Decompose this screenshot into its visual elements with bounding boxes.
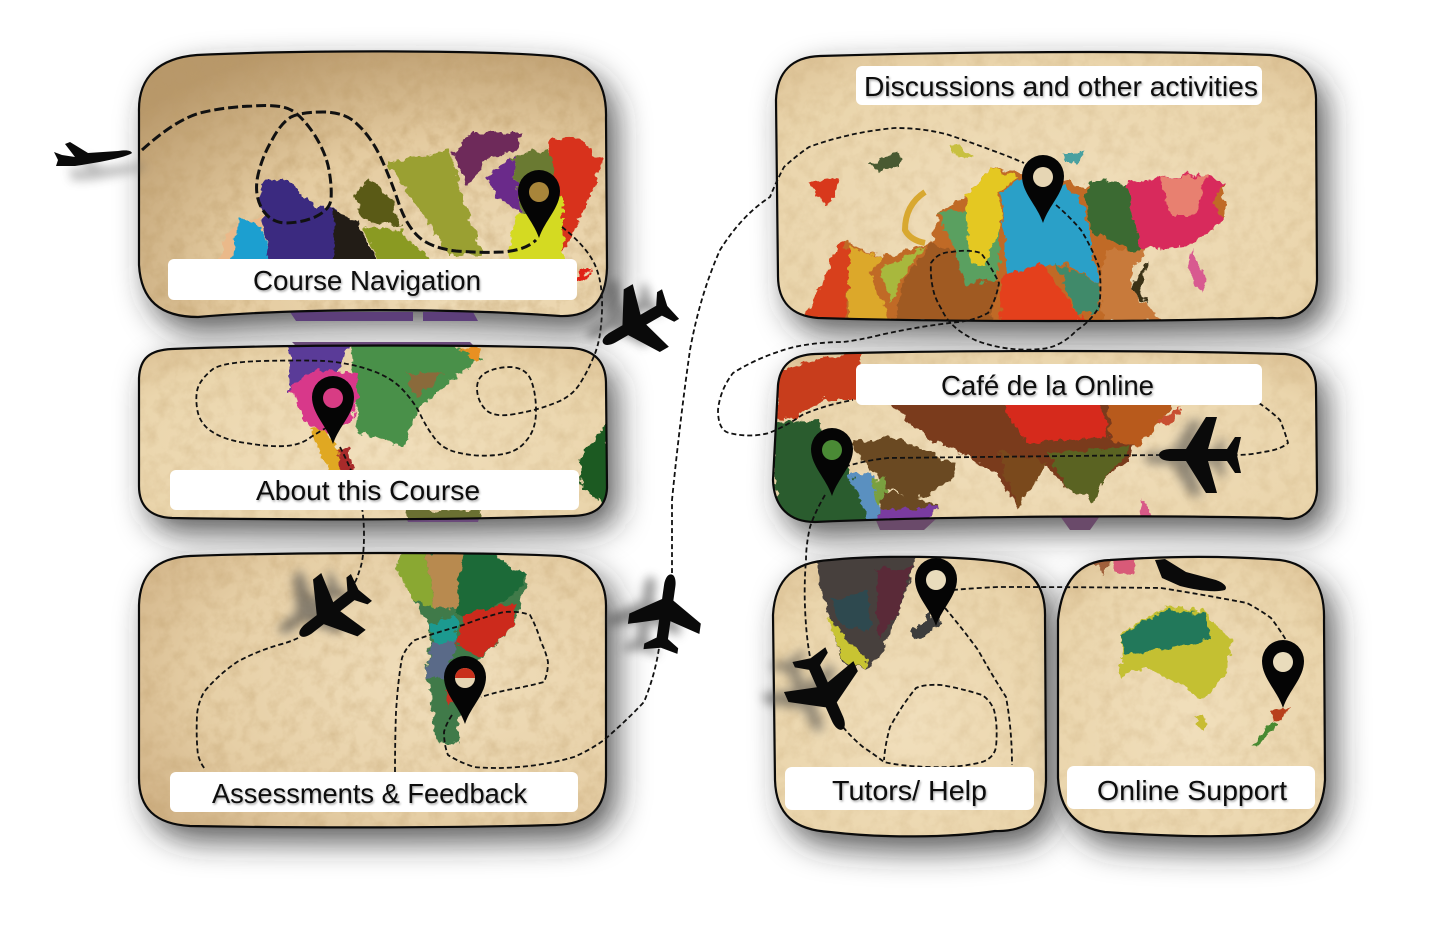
panel: cafe de la online [770, 345, 1327, 536]
icon: pin assessments [444, 656, 486, 724]
route: tutors loops [843, 685, 997, 767]
route: to central column [444, 128, 1024, 768]
route: to tutors panel [805, 495, 825, 657]
route: across cafe panel [847, 403, 1288, 466]
label: Assessments and Feedback: Assessments & Feedback [212, 778, 528, 809]
label: Tutors / Help [785, 767, 1034, 810]
panel: about this course [130, 340, 620, 533]
icon: pin about this course [312, 376, 354, 444]
label: Online Support: Online Support [1097, 775, 1287, 806]
icon: pin course navigation [518, 170, 560, 238]
label: Discussions and other activities: Discussions and other activities [864, 71, 1258, 102]
icon: plane online support [1155, 559, 1226, 591]
world map: Australia and New Zealand [1059, 558, 1324, 834]
strip of map below panel [290, 312, 478, 321]
label: About this Course: About this Course [256, 475, 480, 506]
world map: North America north [144, 73, 606, 316]
label: Cafe de la Online: Café de la Online [941, 370, 1154, 401]
world map: Africa north and Asia south [774, 352, 1316, 521]
icon: pin online support [1262, 640, 1304, 708]
route: thick dashed loop [142, 106, 536, 252]
panel: course navigation [130, 45, 620, 331]
label: About this Course [170, 470, 579, 510]
world map: southern Africa [770, 550, 1055, 840]
strip of map below panel [875, 516, 1100, 530]
label: Assessments and Feedback [170, 772, 578, 812]
world map: North America south [140, 346, 606, 518]
world map: Eurasia north [770, 50, 1325, 325]
icon: plane tutors [752, 639, 877, 747]
route: tutors pin to right [945, 587, 1286, 765]
route: discussions and cafe loops [718, 205, 1100, 436]
icon: plane start [54, 142, 146, 180]
icon: plane central [605, 569, 707, 659]
label: Online Support [1067, 766, 1315, 809]
label: Course Navigation [168, 259, 577, 300]
icon: plane near about panel [569, 267, 689, 374]
world map: South America [142, 554, 605, 826]
panel: assessments and feedback [130, 545, 620, 841]
icon: pin cafe [811, 428, 853, 496]
icon: plane near assessments [258, 556, 384, 664]
icon: plane cafe [1144, 417, 1241, 496]
icon: pin tutors [915, 558, 957, 626]
route: down to assessments [197, 447, 364, 770]
panel: discussions and other activities [770, 50, 1327, 335]
icon: pin discussions [1022, 155, 1064, 223]
panel: tutors and help [770, 550, 1056, 850]
panel: online support [1050, 550, 1335, 850]
label: Tutors / Help: Tutors/ Help [832, 775, 987, 806]
label: Course Navigation: Course Navigation [253, 265, 481, 296]
strip of map above and below panel [292, 342, 480, 522]
label: Cafe de la Online [856, 364, 1262, 405]
route: left column thin dashed [196, 227, 602, 456]
route: assessments loop [395, 612, 548, 772]
